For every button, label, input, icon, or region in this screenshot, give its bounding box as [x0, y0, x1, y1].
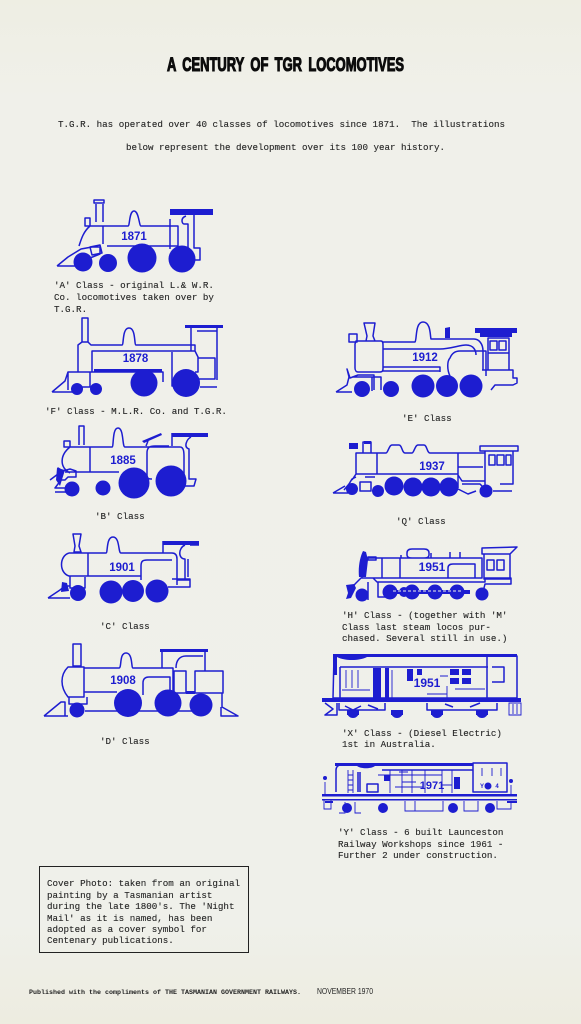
caption: X class [342, 728, 502, 750]
caption: H class: Class last steam locos pur- [342, 622, 491, 633]
callout: cover photo: painting by a Tasmanian artist [47, 890, 212, 901]
locomotive: Q class 1937: 1937 [419, 461, 445, 473]
caption: Y class [338, 827, 503, 861]
callout: cover photo: Centenary publications. [47, 935, 174, 946]
locomotive: D class 1908 [44, 644, 238, 718]
locomotive: E class 1912 [336, 322, 517, 398]
callout: cover photo: Mail' as it is named, has been [47, 913, 212, 924]
caption: X class: 'X' Class - (Diesel Electric) [342, 728, 502, 739]
caption: A class: 'A' Class - original L.& W.R. [54, 280, 214, 291]
locomotive: B class 1885: 1885 [110, 455, 136, 467]
caption: D class: 'D' Class [100, 736, 150, 747]
locomotive: B class 1885 [50, 426, 208, 498]
title: A CENTURY OF TGR LOCOMOTIVES [167, 55, 404, 76]
footer: date: NOVEMBER 1970 [317, 986, 373, 996]
callout: cover photo: Cover Photo: taken from an original [47, 878, 240, 889]
locomotive: H class 1951: 1951 [419, 560, 446, 574]
locomotive: F class 1878: 1878 [123, 353, 149, 365]
caption: H class: chased. Several still in use.) [342, 633, 507, 644]
caption: B class: 'B' Class [95, 511, 145, 522]
intro text: T.G.R. has operated over 40 classes of locomotives since 1871. The illustrations [58, 119, 505, 130]
caption: F class: 'F' Class - M.L.R. Co. and T.G.R. [45, 406, 227, 417]
caption: Y class: Railway Workshops since 1961 - [338, 839, 503, 850]
locomotive: F class 1878 [52, 318, 223, 397]
locomotive: E class 1912: 1912 [412, 352, 438, 364]
locomotive: X class 1951 [322, 654, 521, 718]
locomotive: Y class 1971: 4 [495, 784, 499, 790]
locomotive: D class 1908: 1908 [110, 675, 136, 687]
caption: A class [54, 280, 214, 315]
caption: Q class: 'Q' Class [396, 516, 446, 527]
locomotive: C class 1901 [48, 534, 199, 604]
caption: C class: 'C' Class [100, 621, 150, 632]
intro text [58, 119, 505, 153]
locomotive: C class 1901: 1901 [109, 562, 135, 574]
callout: cover photo [40, 866, 248, 952]
callout: cover photo: during the late 1800's. The 'Night [47, 901, 234, 912]
locomotive: Y class 1971: Y [480, 784, 484, 790]
caption: X class: 1st in Australia. [342, 739, 436, 750]
locomotive: Y class 1971 [322, 763, 517, 813]
callout: cover photo: adopted as a cover symbol for [47, 924, 207, 935]
caption: H class: 'H' Class - (together with 'M' [342, 610, 507, 621]
footer: publisher credit: Published with the compliments of THE TASMANIAN GOVERNMENT RAILWAYS. [29, 989, 301, 996]
caption: Y class: Further 2 under construction. [338, 850, 498, 861]
locomotive: H class 1951 [346, 547, 517, 602]
locomotive: Y class 1971: 1971 [420, 780, 444, 792]
locomotive: A class 1871: 1871 [121, 231, 147, 243]
caption: E class: 'E' Class [402, 413, 452, 424]
locomotive: A class 1871 [57, 200, 213, 272]
caption: A class: T.G.R. [54, 304, 87, 315]
locomotive: Q class 1937 [333, 441, 518, 498]
caption: H class [342, 610, 507, 644]
caption: Y class: 'Y' Class - 6 built Launceston [338, 827, 503, 838]
locomotive: X class 1951: 1951 [414, 676, 441, 690]
caption: A class: Co. locomotives taken over by [54, 292, 214, 303]
intro text: below represent the development over its 100 year history. [126, 142, 445, 153]
